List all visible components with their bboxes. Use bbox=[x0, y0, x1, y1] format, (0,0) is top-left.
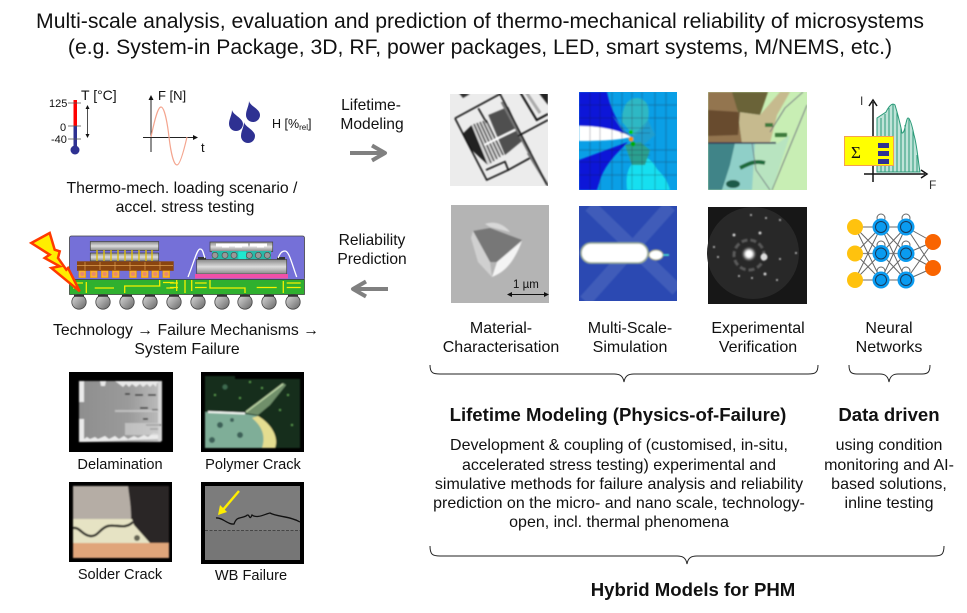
text: data driven description: based solutions, bbox=[831, 476, 947, 493]
title: (e.g. System-in Package, 3D, RF, power packages, LED, smart systems, M/NEMS, etc.) bbox=[68, 36, 892, 59]
polymer crack label: Polymer Crack bbox=[205, 457, 302, 473]
icon: humidity droplets: ] bbox=[308, 117, 311, 131]
solder balls bbox=[72, 295, 300, 309]
column labels: Multi-Scale- bbox=[588, 320, 672, 337]
heading: hybrid models: Hybrid Models for PHM bbox=[591, 579, 795, 600]
text: lifetime modeling description: open, incl. thermal phenomena bbox=[509, 514, 729, 531]
icon: force sine chart bbox=[143, 88, 205, 165]
column labels bbox=[443, 320, 922, 356]
chart: frequency spectrum with sigma box: F bbox=[929, 178, 936, 192]
heading: data driven: Data driven bbox=[838, 404, 940, 425]
icon: thermometer temperature range: 0 bbox=[60, 122, 66, 134]
icon: lightning bolt bbox=[31, 233, 80, 291]
column labels: Verification bbox=[719, 339, 797, 356]
lifetime modeling label and arrow: Modeling bbox=[340, 116, 404, 133]
photo: thermal map verification bbox=[708, 92, 807, 190]
delamination label: Delamination bbox=[77, 457, 163, 473]
text: lifetime modeling description: simulative methods for failure analysis and reliability bbox=[435, 476, 803, 493]
icon: humidity droplets bbox=[229, 101, 311, 143]
text: lifetime modeling description: accelerated stress testing) experimental and bbox=[462, 457, 776, 474]
simulation: FEM crack tip mesh bbox=[579, 92, 677, 190]
text: data driven description bbox=[824, 437, 954, 512]
icon: thermometer temperature range: T [°C] bbox=[81, 87, 117, 103]
photo: diffraction pattern bbox=[707, 207, 807, 304]
icon: force sine chart: t bbox=[201, 140, 205, 155]
simulation: multi-scale crack bbox=[579, 206, 677, 301]
photo: MEMS test structure bbox=[450, 92, 549, 187]
brace: hybrid models bbox=[430, 546, 944, 564]
left stacked dies bbox=[77, 242, 174, 278]
photo: indentation SEM bbox=[451, 205, 549, 303]
brace: data driven bbox=[849, 365, 930, 382]
loading scenario caption bbox=[67, 180, 298, 216]
reliability prediction label and arrow: Reliability bbox=[339, 232, 406, 249]
icon: thermometer temperature range: -40 bbox=[51, 134, 67, 146]
icon: thermometer temperature range: 125 bbox=[49, 98, 67, 110]
text: data driven description: using condition bbox=[836, 437, 942, 454]
heading: lifetime modeling: Lifetime Modeling (Physics-of-Failure) bbox=[450, 404, 786, 425]
right die with wire bonds bbox=[188, 242, 297, 278]
reliability prediction label and arrow: Prediction bbox=[337, 251, 407, 268]
title: Multi-scale analysis, evaluation and prediction of thermo-mechanical reliability of microsystems bbox=[36, 10, 924, 33]
solder crack label: Solder Crack bbox=[78, 567, 163, 583]
loading scenario caption: Thermo-mech. loading scenario / bbox=[67, 180, 298, 197]
icon: thermometer temperature range bbox=[49, 87, 117, 154]
photo: solder crack bbox=[69, 482, 172, 562]
photo: wire bond failure bbox=[201, 482, 304, 564]
chart: frequency spectrum with sigma box: Σ bbox=[851, 143, 861, 162]
icon: force sine chart: F [N] bbox=[158, 88, 186, 103]
brace: lifetime modeling bbox=[430, 365, 818, 382]
text: data driven description: monitoring and AI- bbox=[824, 457, 954, 474]
column labels: Characterisation bbox=[443, 339, 559, 356]
substrate with traces bbox=[70, 280, 304, 294]
text: data driven description: inline testing bbox=[845, 495, 933, 512]
column labels: Material- bbox=[470, 320, 532, 337]
photo: delamination bbox=[69, 372, 173, 452]
icon: humidity droplets: rel bbox=[299, 123, 308, 132]
text: lifetime modeling description: prediction on the micro- and nano scale, technology- bbox=[433, 495, 805, 512]
WB failure label: WB Failure bbox=[215, 568, 287, 584]
icon: humidity droplets: H [% bbox=[272, 117, 299, 131]
column labels: Neural bbox=[865, 320, 913, 337]
photo: polymer crack bbox=[201, 372, 304, 452]
loading scenario caption: accel. stress testing bbox=[116, 199, 254, 216]
lifetime modeling label and arrow bbox=[340, 97, 404, 160]
text: lifetime modeling description bbox=[433, 437, 805, 531]
technology failure caption: Technology → Failure Mechanisms → bbox=[53, 322, 319, 339]
reliability prediction label and arrow bbox=[337, 232, 407, 296]
lifetime modeling label and arrow: Lifetime- bbox=[341, 97, 401, 114]
package mould body bbox=[70, 236, 304, 280]
package cross-section diagram bbox=[70, 236, 304, 309]
column labels: Experimental bbox=[711, 320, 805, 337]
title bbox=[36, 10, 924, 59]
diagram: neural network bbox=[847, 214, 941, 288]
photo: indentation SEM: 1 µm bbox=[513, 279, 539, 291]
chart: frequency spectrum with sigma box bbox=[844, 94, 936, 192]
text: lifetime modeling description: Development & coupling of (customised, in-situ, bbox=[450, 437, 788, 454]
column labels: Simulation bbox=[593, 339, 667, 356]
technology failure caption: System Failure bbox=[134, 341, 240, 358]
technology failure caption bbox=[53, 322, 319, 358]
column labels: Networks bbox=[856, 339, 922, 356]
chart: frequency spectrum with sigma box: I bbox=[860, 94, 863, 108]
